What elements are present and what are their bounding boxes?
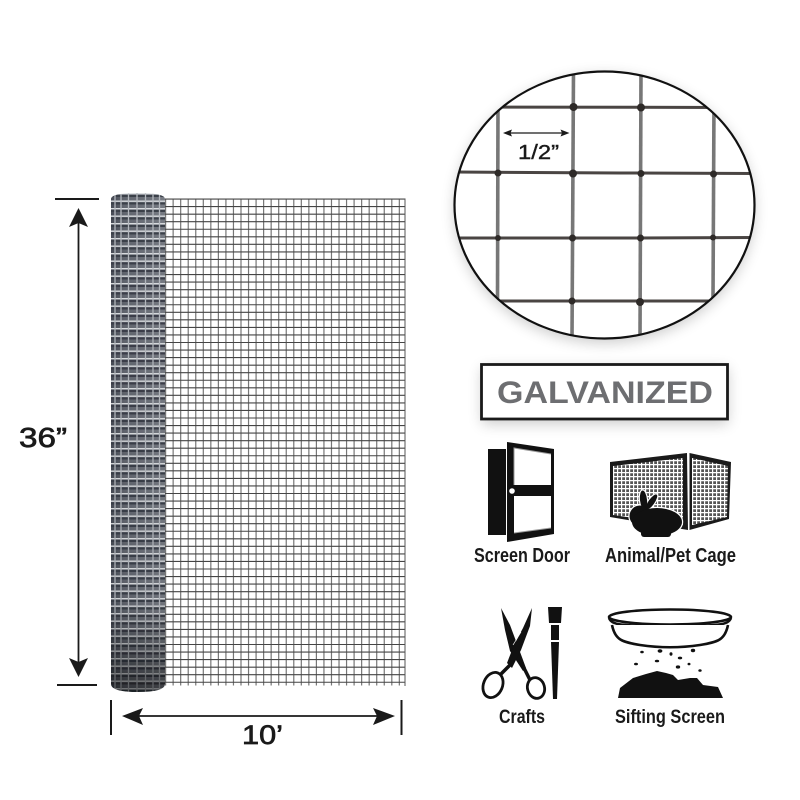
dimension: length 10 feet: 10’ (242, 720, 283, 750)
label: one half inch: 1/2” (518, 142, 559, 164)
label: animal pet cage: Animal/Pet Cage (605, 545, 736, 567)
dimension: length 10 feet (111, 700, 402, 750)
icon: animal cage with rabbit (610, 453, 731, 537)
panel: flat mesh sheet (165, 198, 406, 686)
label: sifting screen: Sifting Screen (615, 707, 725, 728)
icon: sifting pan and soil (609, 610, 731, 698)
badge: galvanized: GALVANIZED (497, 374, 713, 410)
arrow: half-inch spacing (503, 130, 570, 136)
shadow: detail circle (454, 75, 754, 343)
shadow: galvanized badge (482, 368, 728, 424)
label: screen door: Screen Door (474, 545, 570, 567)
icon: scissors and awl (479, 607, 562, 701)
panel: magnified mesh circle (450, 70, 760, 340)
panel: rolled mesh cylinder (111, 193, 165, 692)
badge: galvanized (482, 364, 728, 419)
dimension: height 36 inches: 36” (19, 422, 67, 453)
dimension: height 36 inches (19, 199, 99, 685)
label: crafts: Crafts (499, 707, 545, 728)
icon: rabbit (630, 490, 682, 537)
icon: screen door (488, 442, 554, 542)
